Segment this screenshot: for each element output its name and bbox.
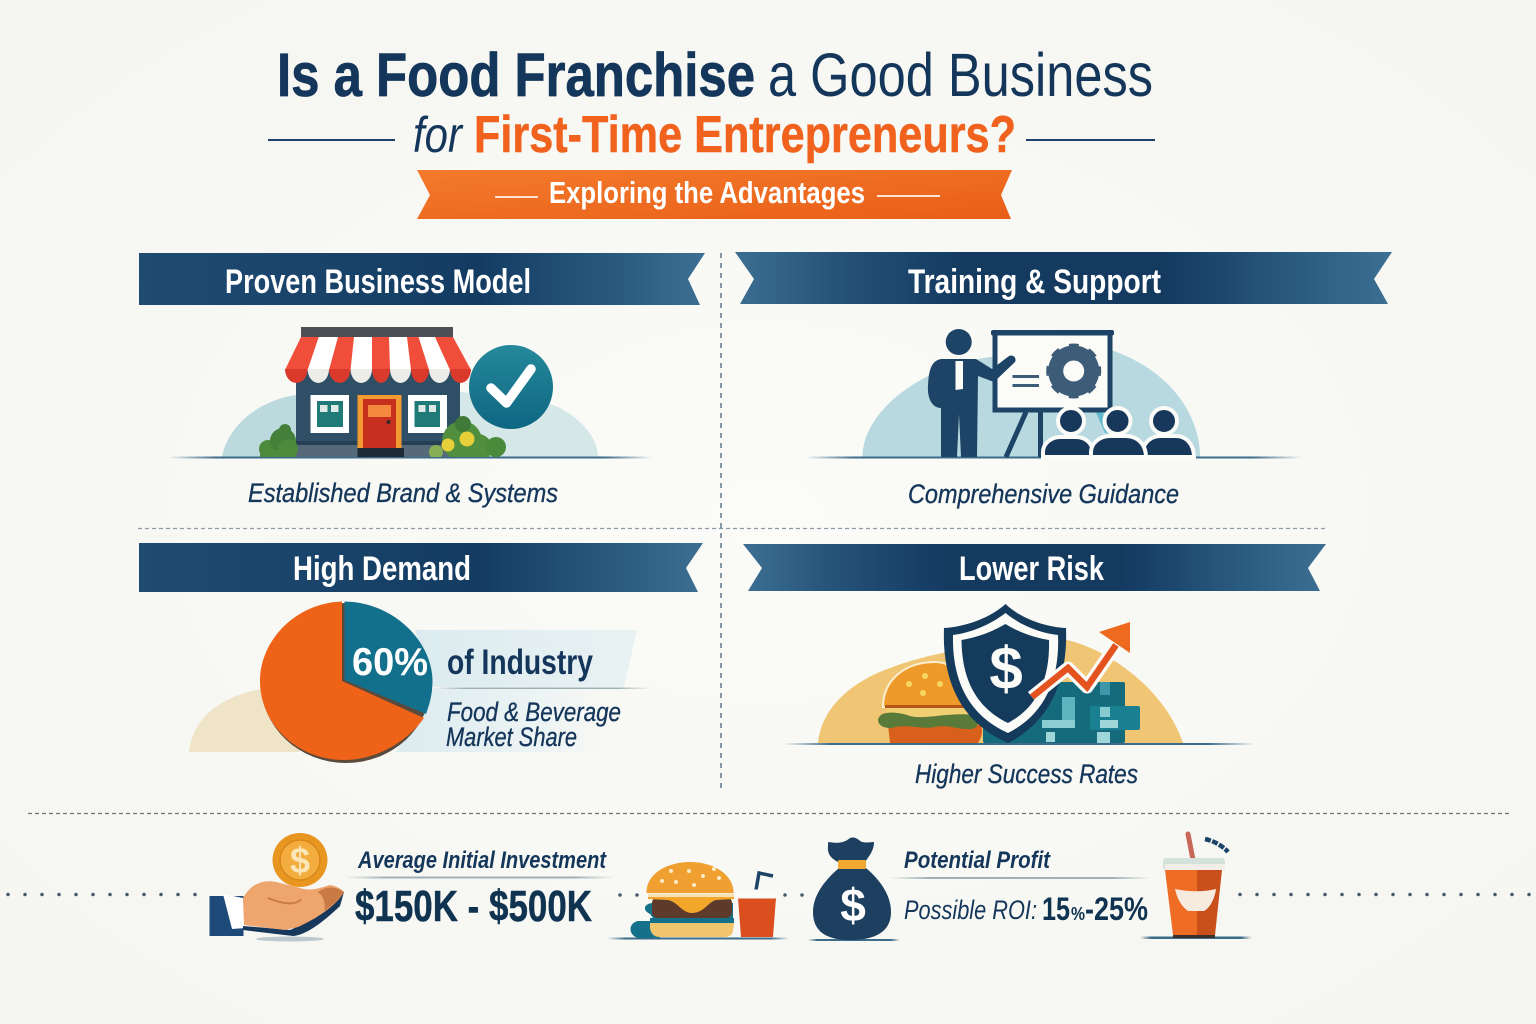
heading ribbon: proven business model <box>139 253 705 305</box>
value: possible roi: -25% <box>1085 891 1148 927</box>
icon: hand holding coin <box>210 833 344 942</box>
subtitle ribbon <box>417 170 1012 219</box>
label: potential profit: Potential Profit <box>904 847 1051 874</box>
panel: proven business model <box>139 253 705 508</box>
icon: money bag <box>808 837 900 941</box>
icon: money bag: $ <box>840 879 866 931</box>
shield <box>944 604 1066 743</box>
icon: trainer at whiteboard with audience <box>805 329 1302 458</box>
caption: higher success rates: Higher Success Rates <box>915 759 1138 789</box>
value: possible roi: Possible ROI: <box>904 895 1037 925</box>
caption: food and beverage market share: Food & Beverage <box>447 697 621 727</box>
grid dividers <box>28 253 1512 814</box>
value: possible roi: 15 <box>1042 891 1070 927</box>
pie chart: 60 percent market share: 60% <box>352 641 428 684</box>
audience figures <box>1043 408 1194 457</box>
label: average initial investment: Average Initial Investment <box>357 847 607 874</box>
title line one: a Good Business <box>768 41 1153 109</box>
burger <box>878 662 982 743</box>
stat: of industry: of Industry <box>447 643 593 682</box>
caption: food and beverage market share <box>446 697 621 752</box>
title line one <box>277 41 1153 109</box>
subtitle ribbon: Exploring the Advantages <box>549 175 865 210</box>
heading ribbon: lower risk: Lower Risk <box>959 550 1104 588</box>
title line one: Is a Food Franchise <box>277 41 755 109</box>
awning <box>285 337 471 383</box>
title line two: First-Time Entrepreneurs? <box>474 106 1016 164</box>
value: possible roi: % <box>1071 904 1085 924</box>
caption: comprehensive guidance: Comprehensive Guidance <box>908 479 1179 509</box>
heading ribbon: high demand: High Demand <box>293 550 471 588</box>
strip: average initial investment <box>210 833 789 942</box>
strip: potential profit <box>808 834 1252 941</box>
heading ribbon: training and support <box>735 252 1392 304</box>
icon: hand holding coin: $ <box>290 840 310 881</box>
money stacks <box>983 682 1140 743</box>
caption: established brand: Established Brand & Systems <box>248 478 558 508</box>
icon: storefront with check <box>168 327 653 462</box>
heading ribbon: high demand <box>139 543 703 592</box>
bushes <box>259 416 506 457</box>
title line two: for <box>413 107 464 163</box>
title block <box>268 41 1155 219</box>
icon: drink cup <box>1140 834 1252 939</box>
growth arrow <box>1032 622 1130 697</box>
panel: lower risk <box>743 544 1326 789</box>
value: possible roi <box>904 891 1148 927</box>
pie chart: 60 percent market share <box>189 602 650 763</box>
icon: shield, burger, cash and growth arrow <box>784 604 1255 745</box>
heading ribbon: training and support: Training & Support <box>908 263 1161 301</box>
value: investment range: $150K - $500K <box>355 882 592 931</box>
panel: high demand <box>139 543 703 763</box>
icon: burger and drink <box>607 862 789 940</box>
bottom dotted strand <box>8 893 1536 897</box>
caption: food and beverage market share: Market Share <box>446 722 577 752</box>
heading ribbon: proven business model: Proven Business Model <box>225 263 531 301</box>
heading ribbon: lower risk <box>743 544 1326 591</box>
shield: $ <box>989 635 1023 702</box>
panel: training and support <box>735 252 1392 509</box>
